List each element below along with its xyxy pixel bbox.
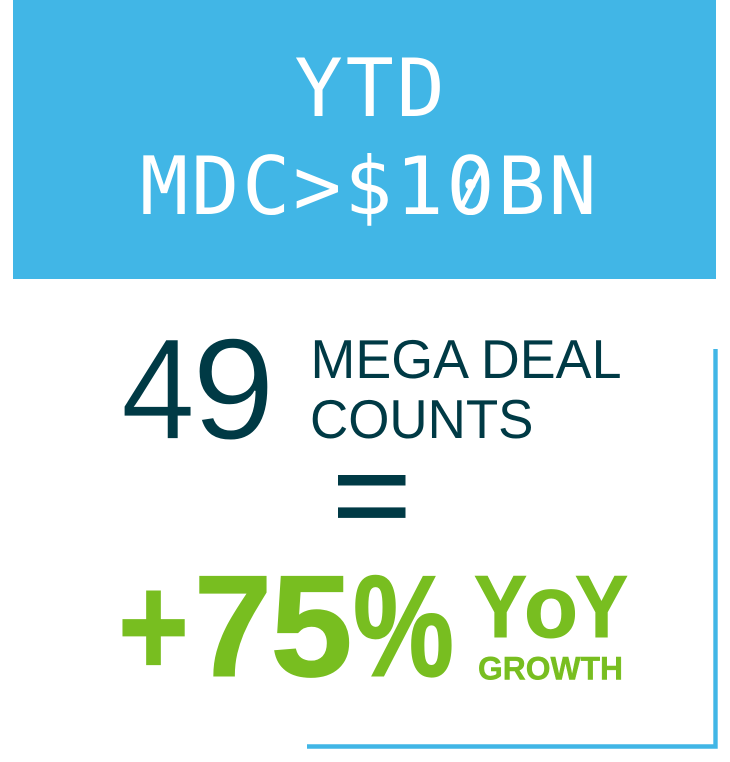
growth figure: + bbox=[118, 546, 189, 707]
number 49: 9 bbox=[192, 309, 275, 470]
growth figure: 7 bbox=[194, 546, 272, 707]
YoY label: o bbox=[524, 557, 578, 656]
number 49: 4 bbox=[121, 309, 195, 470]
mega deal counts label: COUNTS bbox=[310, 388, 534, 450]
mega deal counts label: MEGA DEAL bbox=[310, 328, 622, 390]
title line 1: YTD bbox=[294, 42, 448, 135]
YoY label bbox=[474, 557, 628, 656]
growth figure bbox=[118, 546, 454, 707]
growth figure: % bbox=[353, 546, 454, 707]
growth figure: 5 bbox=[270, 546, 352, 707]
growth label: GROWTH bbox=[478, 651, 623, 687]
equals sign bbox=[338, 475, 406, 518]
mega deal counts label bbox=[310, 328, 622, 450]
number 49 bbox=[121, 309, 275, 470]
YoY label: Y bbox=[575, 557, 628, 656]
header banner bbox=[13, 0, 716, 279]
YoY label: Y bbox=[474, 557, 527, 656]
title line 2: MDC>$10BN bbox=[140, 140, 600, 233]
corner frame bbox=[307, 349, 716, 746]
